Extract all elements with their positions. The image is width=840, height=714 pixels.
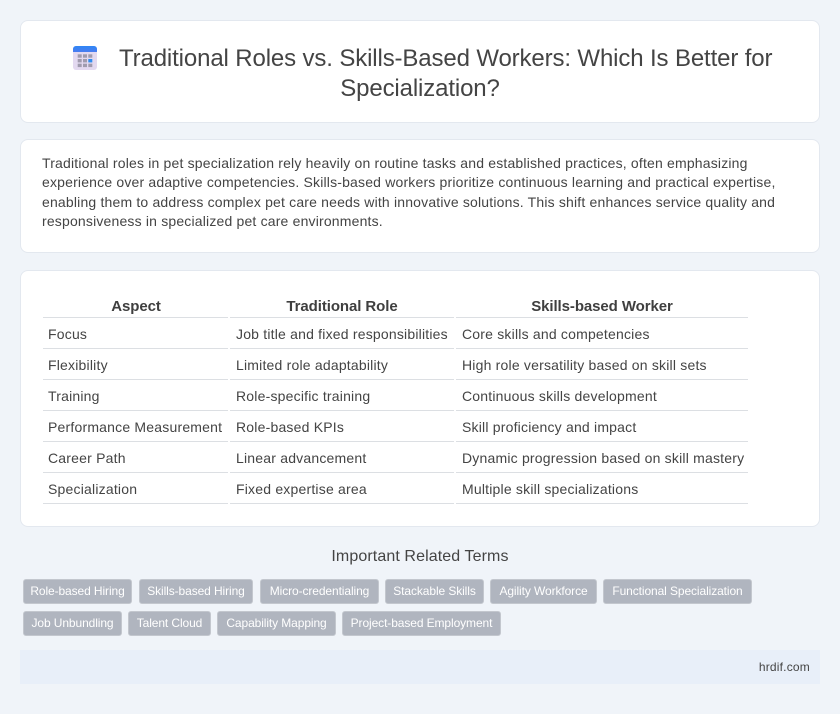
table header: Aspect: [111, 298, 161, 315]
intro text: experience over adaptive competencies. Skills-based workers prioritize continuous learning and practical expertise,: [42, 174, 776, 190]
footer source: hrdif.com: [759, 660, 810, 674]
related terms tags: Agility Workforce: [499, 584, 588, 598]
table header: Traditional Role: [286, 298, 398, 315]
comparison table: Specialization: [48, 481, 137, 497]
title text: Specialization?: [340, 75, 500, 102]
related terms tags: Skills-based Hiring: [147, 584, 245, 598]
intro text: responsiveness in specialized pet care environments.: [42, 213, 383, 229]
related terms tags: Micro-credentialing: [270, 584, 369, 598]
comparison table: Focus: [48, 326, 87, 342]
related terms tags: Functional Specialization: [612, 584, 743, 598]
title text: [119, 45, 772, 102]
related terms tags: Job Unbundling: [32, 616, 114, 630]
comparison table: Flexibility: [48, 357, 108, 373]
comparison table: Limited role adaptability: [236, 357, 388, 373]
intro card: [20, 139, 820, 253]
related terms tags: [23, 579, 752, 636]
comparison table: Skill proficiency and impact: [462, 419, 636, 435]
comparison table: Job title and fixed responsibilities: [236, 326, 448, 342]
title card: [20, 20, 820, 123]
title text: Traditional Roles vs. Skills-Based Workers: Which Is Better for: [119, 45, 772, 72]
related terms tags: Role-based Hiring: [30, 584, 125, 598]
comparison table: Core skills and competencies: [462, 326, 650, 342]
related terms tags: Project-based Employment: [351, 616, 492, 630]
intro text: [42, 155, 776, 229]
comparison table: Dynamic progression based on skill mastery: [462, 450, 744, 466]
related terms heading: Important Related Terms: [331, 548, 509, 565]
intro text: enabling them to address complex pet care needs with innovative solutions. This shift enhances service quality and: [42, 194, 775, 210]
footer bar: [20, 650, 820, 684]
comparison table: Training: [48, 388, 100, 404]
comparison table: Multiple skill specializations: [462, 481, 638, 497]
table header: [111, 298, 673, 315]
related terms tags: Stackable Skills: [393, 584, 476, 598]
comparison table: Career Path: [48, 450, 126, 466]
comparison table: High role versatility based on skill sets: [462, 357, 707, 373]
comparison table: Role-specific training: [236, 388, 370, 404]
table header: Skills-based Worker: [531, 298, 673, 315]
comparison table: [43, 298, 748, 504]
intro text: Traditional roles in pet specialization rely heavily on routine tasks and established practices, often emphasizing: [42, 155, 748, 171]
comparison table: Continuous skills development: [462, 388, 657, 404]
icon: calendar: [73, 46, 97, 70]
related terms tags: Capability Mapping: [226, 616, 327, 630]
related terms tags: Talent Cloud: [137, 616, 202, 630]
comparison table: Fixed expertise area: [236, 481, 367, 497]
comparison table: Linear advancement: [236, 450, 366, 466]
comparison table: Performance Measurement: [48, 419, 222, 435]
comparison table: Role-based KPIs: [236, 419, 344, 435]
table card: [20, 270, 820, 527]
